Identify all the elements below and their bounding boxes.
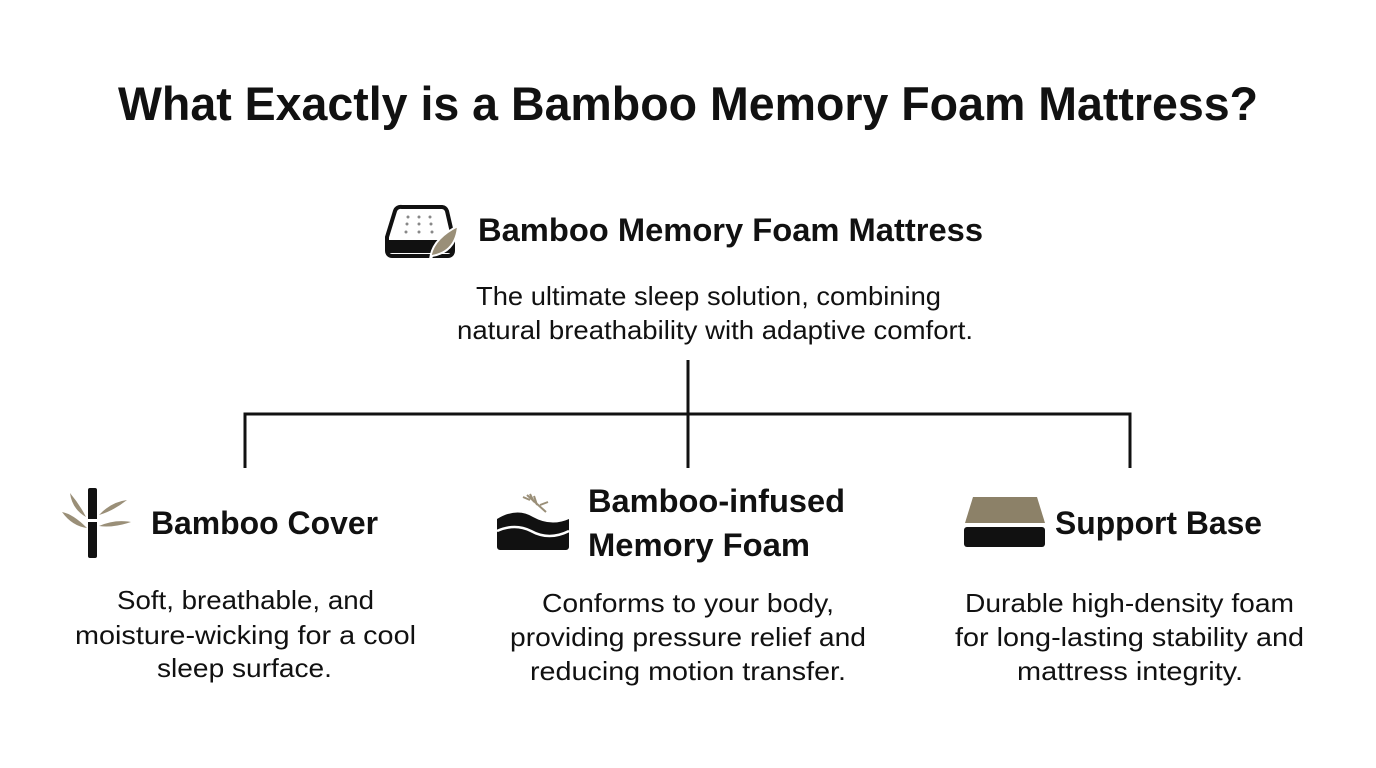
- icon: bamboo: [62, 488, 131, 558]
- heading: Bamboo Cover: [151, 505, 378, 541]
- description: [510, 588, 866, 686]
- description: providing pressure relief and: [510, 622, 866, 652]
- description: for long-lasting stability and: [955, 622, 1304, 652]
- title: What Exactly is a Bamboo Memory Foam Mattress?: [118, 77, 1258, 130]
- description: mattress integrity.: [1017, 656, 1243, 686]
- column: memory foam: Memory Foam: [588, 527, 810, 563]
- main description: natural breathability with adaptive comfort.: [457, 315, 973, 345]
- heading: Support Base: [1055, 505, 1262, 541]
- heading: Bamboo-infused: [588, 483, 845, 519]
- connector tree: [245, 360, 1130, 468]
- column: support base: [955, 497, 1304, 686]
- description: [955, 588, 1304, 686]
- icon: mattress with leaf: [387, 207, 458, 262]
- icon: foam wave: [497, 494, 569, 550]
- column: memory foam: [497, 483, 866, 686]
- description: Soft, breathable, and: [117, 585, 374, 615]
- description: [75, 585, 416, 683]
- description: moisture-wicking for a cool: [75, 620, 416, 650]
- main description: [457, 281, 973, 345]
- main heading: Bamboo Memory Foam Mattress: [478, 212, 983, 248]
- column: bamboo cover: [62, 488, 416, 683]
- main description: The ultimate sleep solution, combining: [476, 281, 941, 311]
- description: Durable high-density foam: [965, 588, 1294, 618]
- icon: base: [964, 497, 1045, 547]
- description: Conforms to your body,: [542, 588, 834, 618]
- description: sleep surface.: [157, 653, 332, 683]
- description: reducing motion transfer.: [530, 656, 846, 686]
